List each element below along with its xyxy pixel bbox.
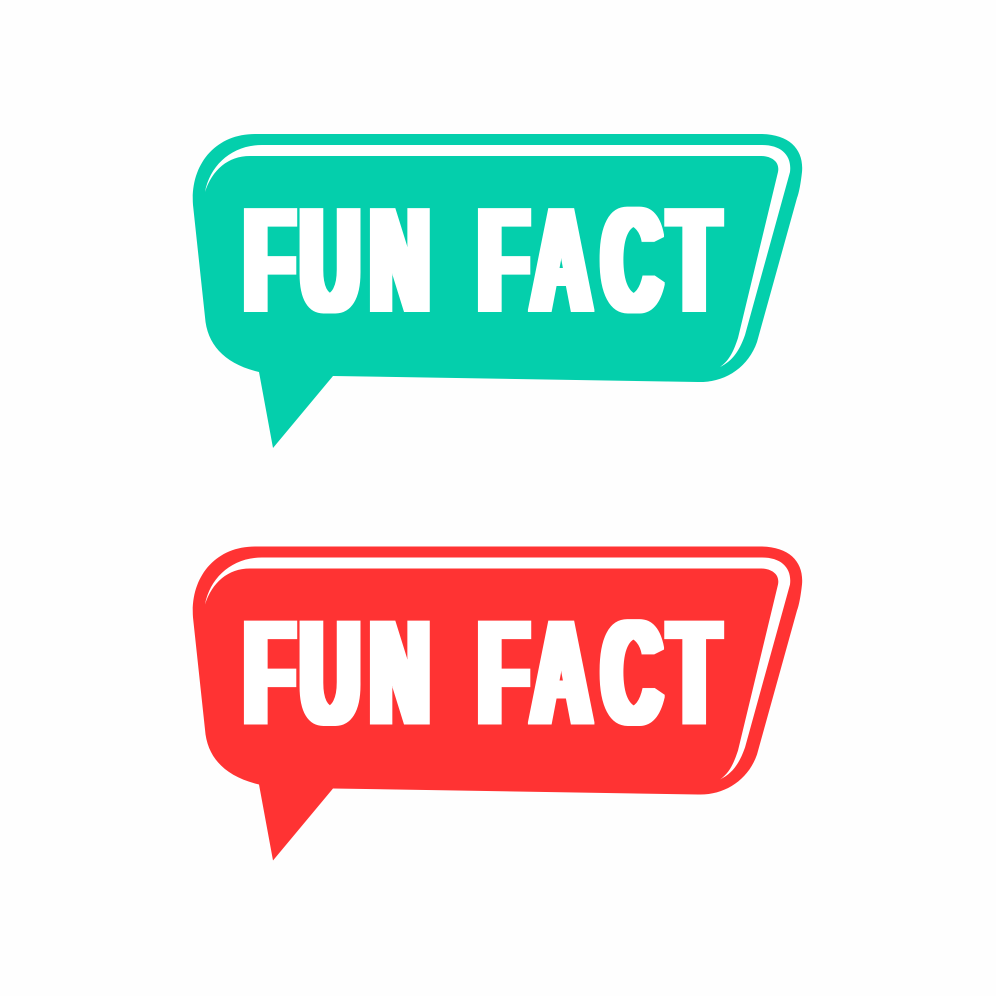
bubble body with tail [193, 546, 802, 860]
speech bubble: red [193, 546, 802, 860]
label: FUN FACT: FUN FACT [244, 591, 719, 756]
bubble body with tail [193, 134, 802, 448]
label: FUN FACT: FUN FACT [244, 178, 719, 343]
speech bubble: teal [193, 134, 802, 448]
white highlight line [205, 145, 790, 367]
white highlight line [205, 558, 790, 780]
